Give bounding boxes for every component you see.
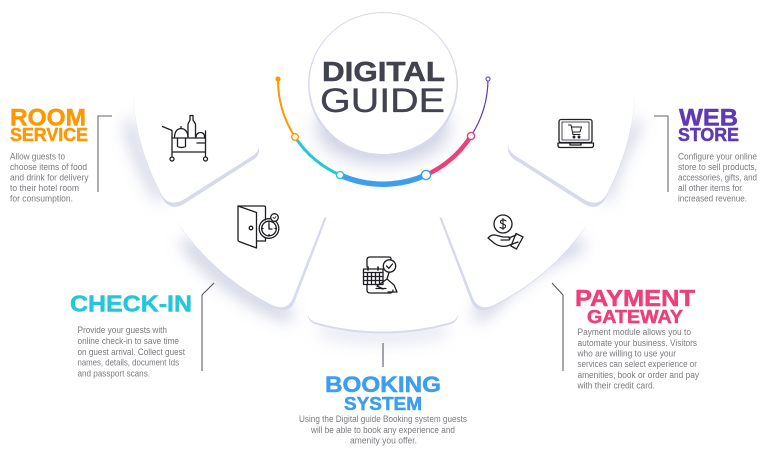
- connector: booking system: [382, 343, 384, 367]
- description: web store: increased revenue.: [678, 194, 747, 204]
- text block: booking system: [299, 372, 467, 446]
- description: payment gateway: amenities, book or order and pay: [578, 370, 699, 381]
- heading: gateway: GATEWAY: [587, 307, 683, 327]
- icon: door and stopwatch: [238, 206, 279, 248]
- description: booking system: will be able to book any experience and: [310, 425, 455, 436]
- connector: check-in: [202, 283, 214, 371]
- petal: check-in: [180, 212, 327, 310]
- description: booking system: [299, 414, 467, 446]
- description: check-in: names, details, document Ids: [78, 358, 179, 368]
- timeline arc: [275, 76, 490, 184]
- connector: web store: [654, 116, 668, 192]
- text block: web store: [678, 104, 757, 204]
- description: room service: Allow guests to: [10, 152, 65, 162]
- title: guide: GUIDE: [320, 82, 445, 120]
- connector: room service: [98, 116, 112, 192]
- description: booking system: amenity you offer.: [350, 436, 417, 446]
- description: room service: to their hotel room: [10, 183, 79, 194]
- description: room service: [10, 152, 89, 204]
- description: web store: Configure your online: [678, 152, 757, 162]
- icon: laptop cart: [558, 120, 594, 148]
- petal: room service: [133, 60, 259, 207]
- heading: check-in: CHECK-IN: [70, 290, 192, 316]
- description: check-in: and passport scans.: [78, 368, 150, 380]
- petal: web store: [508, 60, 635, 207]
- description: payment gateway: with their credit card.: [577, 380, 655, 392]
- description: booking system: Using the Digital guide Booking system guests: [299, 414, 467, 425]
- description: payment gateway: Payment module allows you to: [578, 327, 691, 338]
- title: digital: DIGITAL: [322, 56, 445, 87]
- petal shadows: [130, 125, 636, 337]
- description: check-in: [78, 325, 185, 380]
- description: room service: for consumption.: [10, 194, 73, 204]
- heading: system: SYSTEM: [344, 394, 422, 414]
- heading: payment: PAYMENT: [575, 285, 695, 311]
- petal: payment gateway: [439, 212, 586, 310]
- icon: booking phone and calendar: [364, 257, 397, 293]
- icon: room service cart: [162, 116, 208, 161]
- text block: check-in: [70, 290, 192, 380]
- petal: booking system: [308, 230, 458, 334]
- description: web store: [678, 152, 757, 204]
- description: room service: choose items of food: [10, 162, 87, 173]
- heading: booking: BOOKING: [325, 372, 441, 397]
- heading: service: SERVICE: [10, 125, 88, 145]
- description: web store: all other items for: [678, 183, 743, 194]
- connector: payment gateway: [552, 283, 563, 371]
- heading: room: ROOM: [10, 104, 86, 132]
- text block: payment gateway: [575, 285, 699, 392]
- description: payment gateway: [577, 327, 699, 392]
- text block: room service: [10, 104, 89, 204]
- icon: hand with coin: [488, 215, 523, 249]
- description: room service: and drink for delivery: [10, 172, 89, 184]
- description: check-in: online check-in to save time: [78, 336, 179, 347]
- description: web store: store to sell products,: [678, 162, 757, 173]
- description: check-in: on guest arrival. Collect guest: [78, 347, 185, 358]
- description: payment gateway: automate your business. Visitors: [578, 338, 697, 349]
- heading: store: STORE: [678, 125, 739, 145]
- heading: web: WEB: [679, 104, 738, 132]
- description: payment gateway: services can select experience or: [578, 359, 698, 370]
- description: check-in: Provide your guests with: [78, 325, 167, 336]
- description: payment gateway: who are willing to use your: [577, 348, 677, 360]
- centre circle: digital guide: [308, 12, 458, 164]
